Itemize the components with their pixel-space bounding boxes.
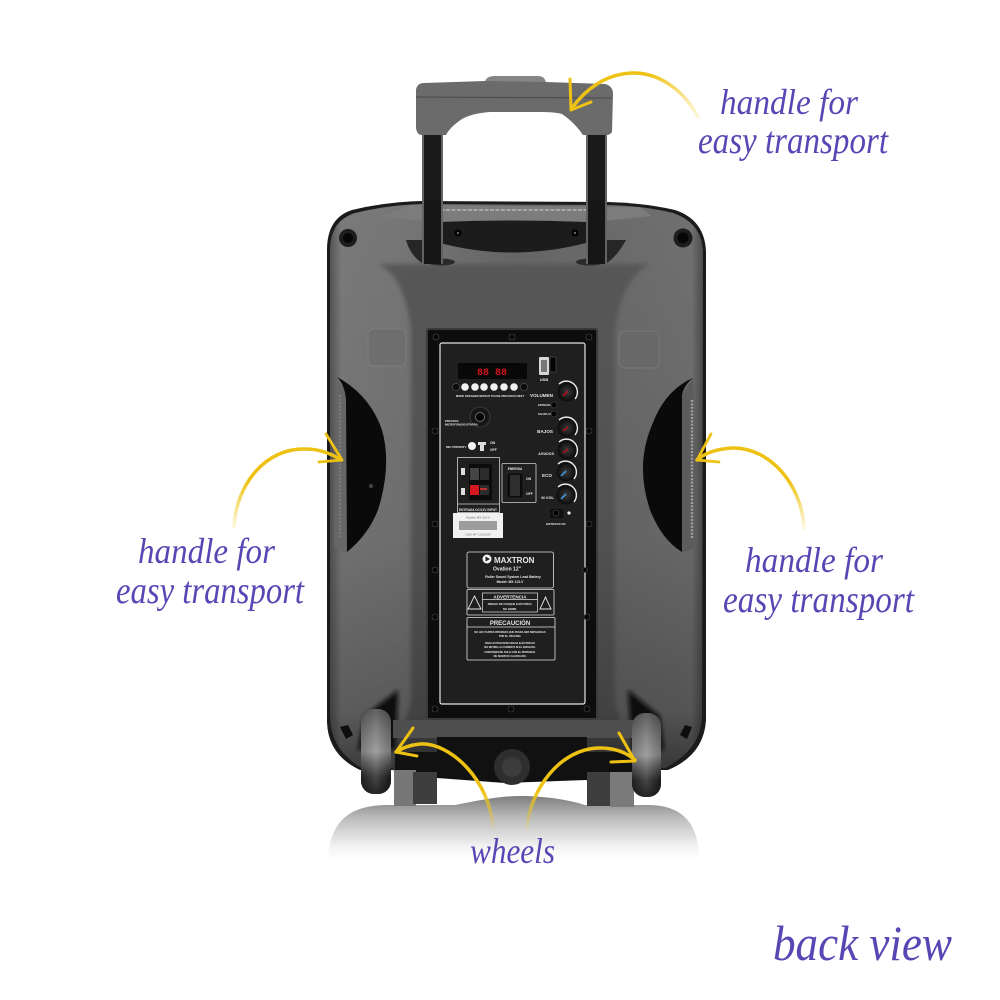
label: top handle: handle for	[720, 82, 859, 122]
knob labels: M VOL	[541, 495, 555, 500]
warning label: ADVERTENCIA	[493, 594, 527, 599]
volume knobs	[556, 381, 577, 504]
floor reflection of speaker	[328, 796, 700, 860]
knob labels: VOLUMEN	[530, 393, 554, 398]
precaution label	[467, 618, 555, 660]
central column with shoulders	[378, 264, 650, 770]
poles in front of the recess	[422, 135, 607, 264]
microphone jack: MICROFONO/GUITARRA	[445, 422, 478, 426]
playback buttons: MODE SPEAKER REPEAT PAUSE PREVIOUS NEXT	[456, 394, 524, 398]
mic priority switch	[446, 441, 497, 452]
corner screw left	[339, 229, 357, 247]
arrow: left wheel	[396, 728, 493, 828]
left side handle recess	[334, 377, 386, 552]
precaution label: NO HAY PARTES INTERNAS QUE PUEDA SER REPARADAS	[474, 631, 546, 634]
label: right handle: easy transport	[723, 579, 915, 621]
battery terminal box	[458, 458, 500, 512]
knob labels: BAJOS	[537, 429, 553, 434]
knob labels: ENTRADA AUX	[538, 403, 557, 407]
label: top handle: easy transport	[698, 120, 889, 162]
lower body contours	[340, 690, 692, 750]
battery terminal box: ENTRADA DC/12V INPUT	[459, 508, 497, 512]
LED display: 88 88	[477, 368, 507, 379]
serial number sticker: 1308 MF 11010242	[465, 532, 491, 536]
serial number sticker: Modelo MX 113-V	[466, 516, 490, 520]
knob labels: SALIDA AUDIO	[538, 412, 557, 416]
warning label: NO ABRIR.	[503, 607, 517, 611]
arrow: left side handle	[234, 434, 342, 527]
speaker cabinet	[327, 135, 706, 770]
top grip recess	[382, 205, 652, 266]
panel screws	[432, 334, 592, 712]
precaution label: NO RETIRE LA CUBIERTA NI EL ENCHUFE.	[484, 646, 536, 649]
label: back view: back view	[773, 915, 952, 971]
right side handle recess	[643, 378, 697, 552]
arrow: right wheel	[527, 733, 635, 828]
left wheel	[361, 709, 391, 794]
knob labels	[530, 393, 557, 500]
telescopic trolley handle	[416, 76, 613, 265]
MAXTRON label	[467, 552, 554, 588]
embossed rectangle left	[368, 329, 406, 366]
precaution label: DE SERVICIO CALIFICADO.	[494, 655, 527, 658]
precaution label: POR EL USUARIO.	[499, 635, 521, 638]
mic priority switch: MIC PRIORITY	[446, 445, 467, 449]
USB and SD ports: USB	[540, 377, 548, 382]
MAXTRON label: Model: MX 113-V	[497, 580, 524, 584]
embossed rectangle right	[619, 331, 659, 368]
rear control panel	[426, 328, 598, 720]
MAXTRON label: Ovation 12"	[493, 566, 522, 572]
playback buttons	[452, 383, 528, 398]
MAXTRON label: MAXTRON	[494, 556, 535, 565]
label: wheels: wheels	[470, 831, 555, 871]
corner screw right	[674, 228, 692, 248]
USB and SD ports	[539, 357, 556, 382]
DC input: ENTRADA DC	[546, 522, 567, 526]
warning label: RIESGO DE CHOQUE ELÉCTRICO,	[488, 601, 533, 606]
label: left handle	[116, 531, 305, 612]
power switch box: ON	[526, 477, 532, 481]
microphone jack	[445, 407, 490, 427]
power switch box	[502, 464, 536, 502]
label: top handle	[698, 82, 889, 162]
precaution label: PARA EVITAR DESCARGAS ELÉCTRICAS	[485, 642, 535, 645]
label: right handle: handle for	[745, 540, 884, 580]
power switch box: ENERGIA	[508, 467, 523, 471]
label: right handle	[723, 540, 915, 621]
knob labels: ECO	[542, 473, 552, 478]
wheel housing and stand	[393, 720, 634, 807]
warning label	[467, 590, 554, 615]
label: left handle: easy transport	[116, 570, 305, 612]
precaution label: COMUNIQUESE SOLO CON EL PERSONAL	[484, 651, 536, 654]
precaution label: PRECAUCIÓN	[490, 619, 530, 627]
microphone jack: ENTRADA	[445, 419, 459, 423]
arrow: top handle	[570, 73, 698, 117]
mic priority switch: ON	[490, 441, 496, 445]
MAXTRON label: Roller Sound System Lead Battery	[485, 575, 541, 579]
power switch box: OFF	[526, 492, 533, 496]
label: left handle: handle for	[138, 531, 276, 571]
right wheel	[632, 713, 661, 797]
LED display	[458, 363, 527, 379]
mic priority switch: OFF	[490, 448, 497, 452]
DC input	[546, 508, 571, 526]
knob labels: AGUDOS	[538, 452, 555, 456]
arrow: right side handle	[697, 434, 804, 528]
serial number sticker	[453, 513, 503, 538]
